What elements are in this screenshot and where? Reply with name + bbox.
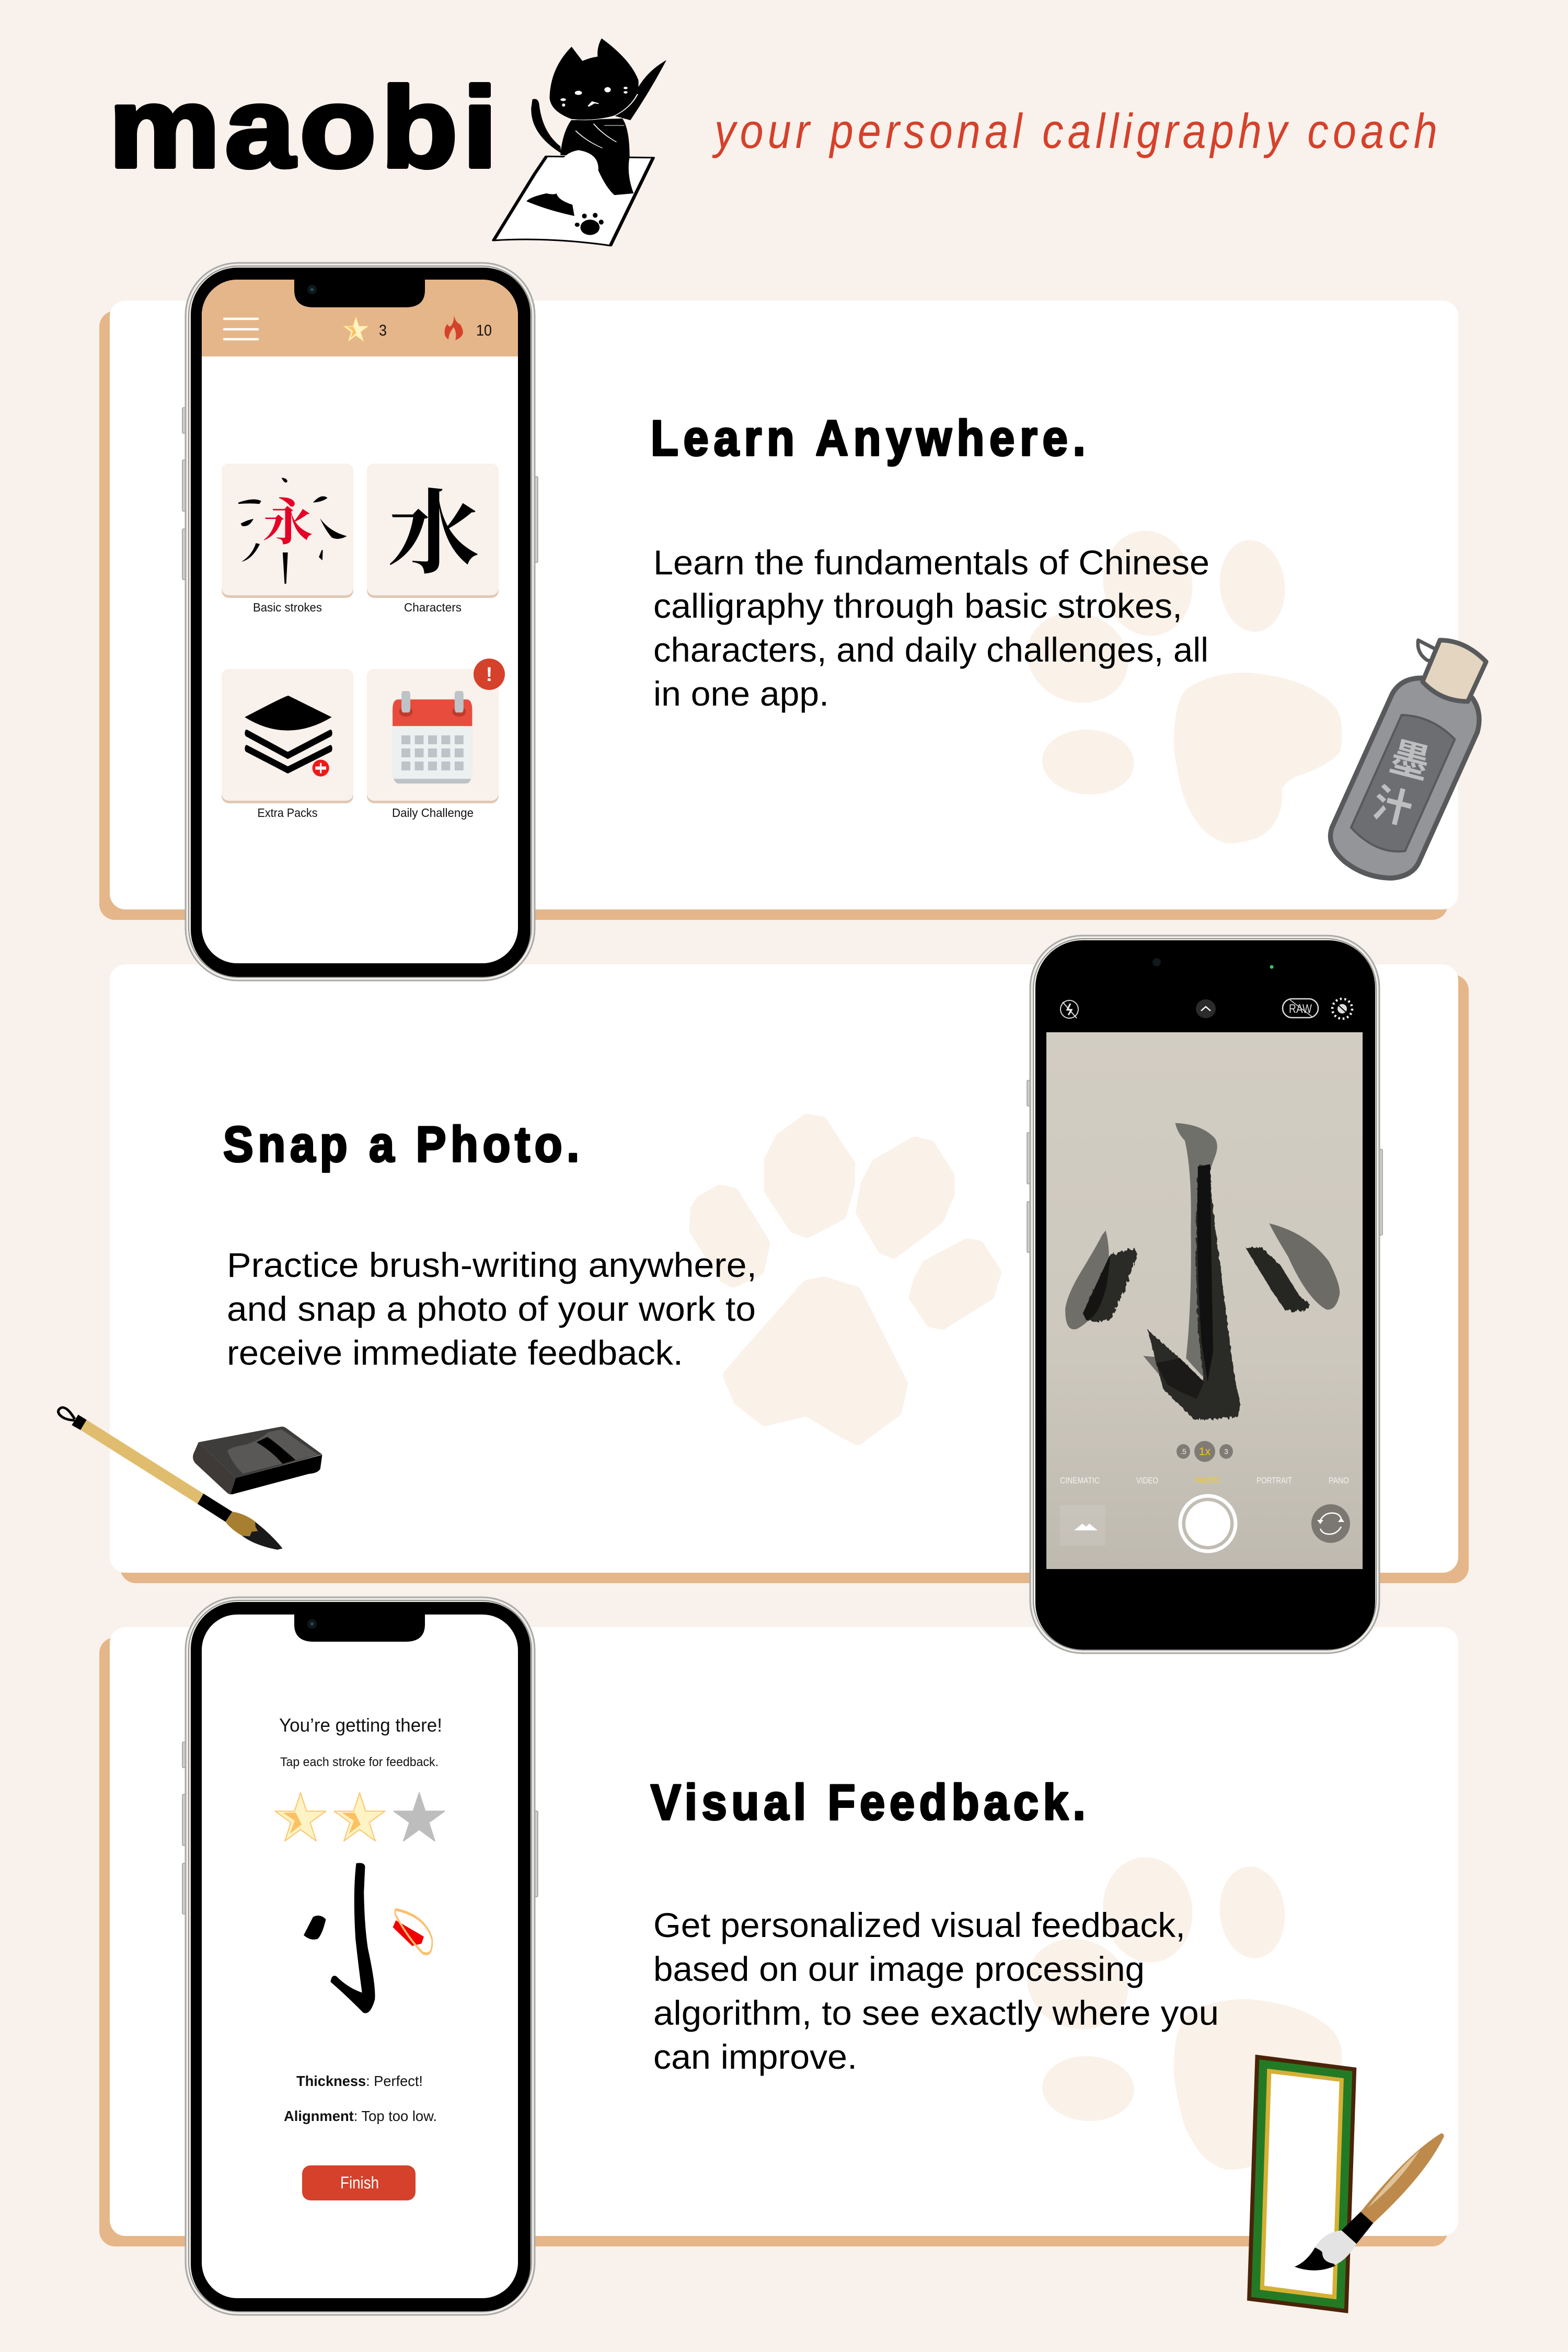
camera top controls: RAW: [1289, 1002, 1312, 1016]
icon: ink bottle: 墨: [1386, 734, 1434, 787]
tile: extra packs: Extra Packs: [257, 806, 318, 820]
body text: [227, 1246, 757, 1372]
heading: Learn Anywhere.: [651, 410, 1086, 466]
icon: paint brush: [1295, 2134, 1444, 2270]
zoom chips: 1x: [1199, 1446, 1211, 1458]
tile: basic strokes: 永: [263, 495, 313, 551]
thickness feedback: Thickness: Perfect!: [296, 2073, 423, 2089]
icon: ink brush: [58, 1408, 283, 1550]
body text: receive immediate feedback.: [227, 1333, 683, 1372]
feedback title: You’re getting there!: [279, 1714, 442, 1736]
heading: Snap a Photo.: [223, 1116, 579, 1172]
camera modes: PANO: [1329, 1475, 1349, 1485]
icon: ink bottle: 汁: [1369, 780, 1416, 833]
notch: [294, 1611, 425, 1642]
paw watermark: [1014, 1850, 1342, 2170]
tile: characters: [367, 464, 499, 614]
body text: Get personalized visual feedback,: [653, 1906, 1185, 1944]
body text: based on our image processing: [653, 1950, 1145, 1988]
body text: [653, 543, 1209, 713]
flip camera button: [1311, 1504, 1350, 1543]
zoom chips: .5: [1180, 1447, 1186, 1456]
tile: daily challenge: [367, 659, 505, 820]
camera modes: CINEMATIC: [1060, 1475, 1100, 1485]
heading: Visual Feedback.: [651, 1774, 1086, 1830]
tile: characters: Characters: [404, 601, 462, 614]
alignment feedback: Alignment: Top too low.: [284, 2108, 437, 2124]
paw watermark: [1014, 524, 1342, 843]
camera modes: PORTRAIT: [1256, 1475, 1292, 1485]
zoom chips: [1177, 1441, 1233, 1462]
tile: daily challenge: Daily Challenge: [392, 806, 474, 820]
body text: algorithm, to see exactly where you: [653, 1993, 1219, 2032]
icon: inkstone: [193, 1426, 322, 1494]
icon: ink bottle: [1331, 640, 1486, 878]
notch: [294, 277, 425, 307]
icon: framed scroll: [1247, 2055, 1356, 2313]
panel: visual feedback: [99, 1627, 1458, 2246]
body text: can improve.: [653, 2037, 857, 2076]
phone: app home screen: [182, 263, 538, 981]
app header bar: 3: [379, 322, 387, 339]
paw watermark: [695, 1120, 995, 1439]
screen: [202, 1615, 518, 2298]
app header bar: 10: [476, 322, 492, 339]
icon: black cat painting on paper: [493, 38, 666, 246]
tile: characters: 水: [388, 484, 480, 586]
feedback hint: Tap each stroke for feedback.: [280, 1755, 439, 1769]
finish button: Finish: [340, 2173, 379, 2192]
app header bar: [202, 280, 518, 356]
body text: and snap a photo of your work to: [227, 1289, 756, 1328]
tagline: your personal calligraphy coach: [712, 103, 1437, 158]
shutter button: [1180, 1496, 1236, 1551]
photo of brush strokes: [1046, 1032, 1363, 1569]
camera modes: PHOTO: [1195, 1475, 1219, 1485]
logo wordmark: maobi: maobi: [109, 64, 498, 191]
camera modes: [1060, 1475, 1349, 1485]
tile: extra packs: [222, 669, 353, 820]
body text: calligraphy through basic strokes,: [653, 586, 1182, 625]
body text: in one app.: [653, 674, 829, 713]
camera top controls: [1060, 958, 1352, 1019]
screen: [202, 280, 518, 963]
star rating: [275, 1793, 445, 1841]
body text: [653, 1906, 1219, 2076]
tile: basic strokes: [222, 464, 353, 614]
character strokes with highlight: [304, 1863, 432, 2013]
panel: learn anywhere: [99, 301, 1458, 920]
body text: Practice brush-writing anywhere,: [227, 1246, 757, 1284]
tile: daily challenge: !: [486, 664, 492, 686]
finish button: [302, 2165, 416, 2200]
phone: feedback screen: [182, 1597, 538, 2315]
zoom chips: 3: [1224, 1447, 1228, 1456]
body text: Learn the fundamentals of Chinese: [653, 543, 1209, 582]
phone: camera view: [1027, 936, 1382, 1653]
tile: basic strokes: Basic strokes: [253, 601, 322, 614]
panel: snap a photo: [110, 964, 1469, 1583]
gallery thumbnail: [1060, 1505, 1105, 1546]
camera modes: VIDEO: [1136, 1475, 1158, 1485]
body text: characters, and daily challenges, all: [653, 630, 1208, 669]
